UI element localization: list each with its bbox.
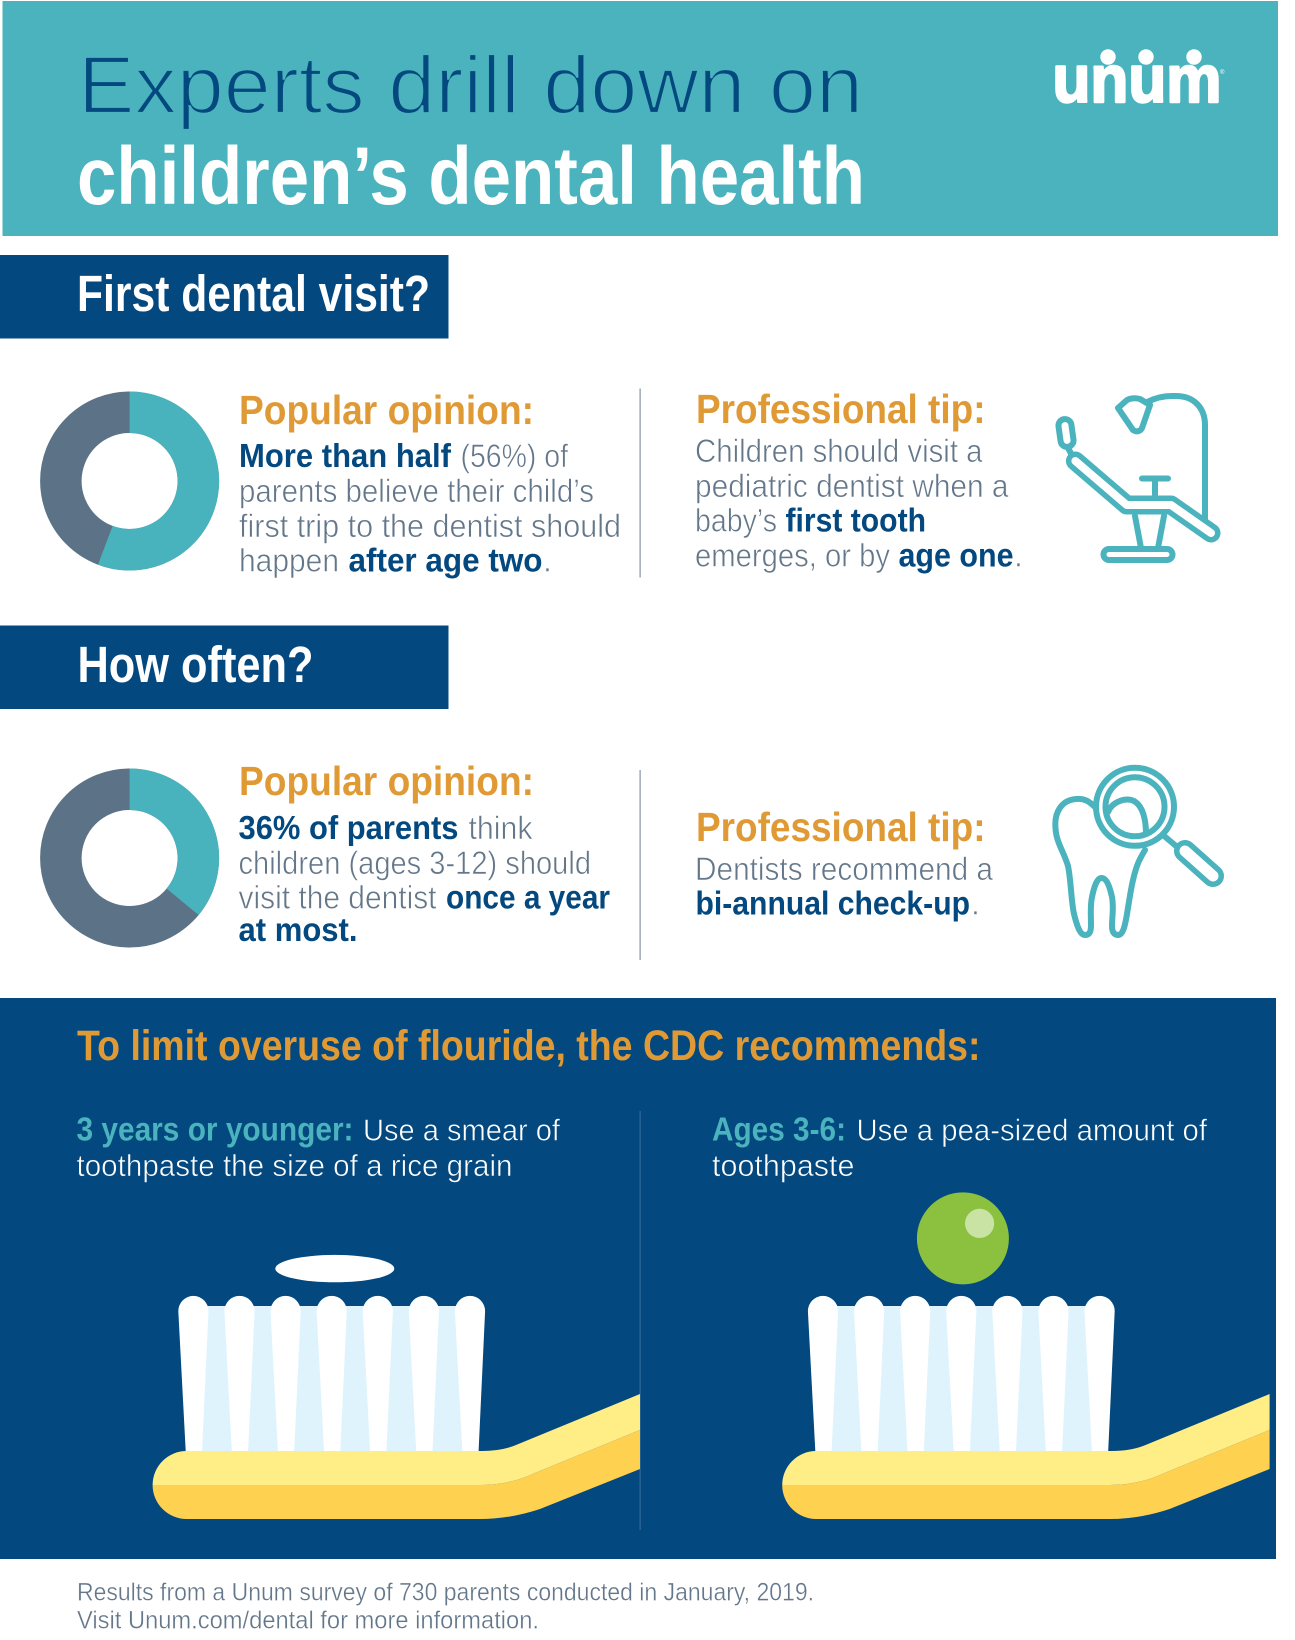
text block: ages 3-6: Ages 3-6: [712, 1110, 846, 1148]
section heading: first dental visit: First dental visit? [77, 265, 430, 322]
toothbrush 2 [782, 1296, 1270, 1519]
text block: professional tip 1 [695, 386, 1023, 574]
toothbrush 1 [153, 1296, 640, 1519]
text block: popular opinion 1: after age two [348, 542, 542, 578]
text block: professional tip 2 [695, 804, 993, 922]
text block: professional tip 1: baby’s [695, 502, 777, 538]
text block: popular opinion 2: 36% of parents [238, 809, 458, 846]
text block: professional tip 2: Professional tip: [696, 804, 986, 850]
text block: professional tip 2: Dentists recommend a [695, 851, 993, 887]
text block: professional tip 1: . [1014, 538, 1023, 574]
text block: 3 years or younger [76, 1110, 560, 1183]
icon: tooth with magnifier [1055, 768, 1213, 935]
pea-sized toothpaste [917, 1192, 1009, 1284]
text block: popular opinion 2: think [468, 810, 533, 846]
text block: popular opinion 2: at most. [238, 911, 358, 948]
icon: dental chair [1058, 396, 1211, 560]
text block: ages 3-6 [712, 1110, 1207, 1183]
text block: professional tip 1: Children should visit a [695, 433, 983, 469]
text block: professional tip 1: Professional tip: [696, 386, 986, 432]
panel: CDC fluoride recommendations [0, 998, 1276, 1559]
section heading: first dental visit [0, 255, 448, 338]
text block: popular opinion 2: once a year [446, 878, 610, 916]
footer source note: Visit Unum.com/dental for more information. [77, 1606, 539, 1634]
text block: professional tip 2: . [971, 886, 980, 922]
text block: popular opinion 1: parents believe their child’s [239, 473, 594, 509]
text block: professional tip 1: pediatric dentist when a [695, 468, 1009, 504]
text block: professional tip 1: emerges, or by [695, 538, 890, 574]
text block: ages 3-6: toothpaste [712, 1148, 854, 1183]
text block: 3 years or younger: Use a smear of [363, 1112, 560, 1148]
text block: popular opinion 1: . [543, 542, 552, 578]
text block: popular opinion 1: More than half [239, 437, 452, 474]
text block: popular opinion 1: first trip to the dentist should [239, 508, 621, 544]
section heading: how often: How often? [78, 636, 314, 693]
text block: 3 years or younger: 3 years or younger: [76, 1110, 354, 1148]
title [77, 40, 865, 222]
footer source note: Results from a Unum survey of 730 parents conducted in January, 2019. [77, 1578, 814, 1606]
footer source note [77, 1578, 814, 1634]
title: children’s dental health [77, 131, 865, 222]
panel heading: To limit overuse of flouride, the CDC recommends: [77, 1022, 980, 1070]
donut chart: 56 percent [61, 412, 198, 550]
text block: 3 years or younger: toothpaste the size of a rice grain [76, 1148, 512, 1183]
text block: popular opinion 2 [238, 758, 610, 948]
logo: unum: ® [1220, 69, 1225, 76]
rice-grain smear of toothpaste [275, 1255, 394, 1282]
section heading: how often [0, 626, 448, 709]
text block: ages 3-6: Use a pea-sized amount of [856, 1112, 1207, 1148]
text block: popular opinion 2: children (ages 3-12) should [238, 845, 591, 881]
text block: professional tip 1: first tooth [786, 502, 926, 538]
text block: popular opinion 2: visit the dentist [238, 880, 437, 916]
text block: popular opinion 1: happen [239, 542, 339, 578]
donut chart: 36 percent [61, 789, 198, 927]
text block: popular opinion 1: (56%) of [460, 438, 568, 474]
text block: popular opinion 1 [239, 387, 621, 578]
text block: popular opinion 2: Popular opinion: [239, 758, 534, 804]
text block: professional tip 1: age one [898, 536, 1014, 574]
header banner [2, 1, 1278, 236]
text block: popular opinion 1: Popular opinion: [239, 387, 534, 433]
text block: professional tip 2: bi-annual check-up [696, 884, 970, 922]
logo: unum: unum [1052, 42, 1222, 117]
title: Experts drill down on [78, 40, 863, 131]
